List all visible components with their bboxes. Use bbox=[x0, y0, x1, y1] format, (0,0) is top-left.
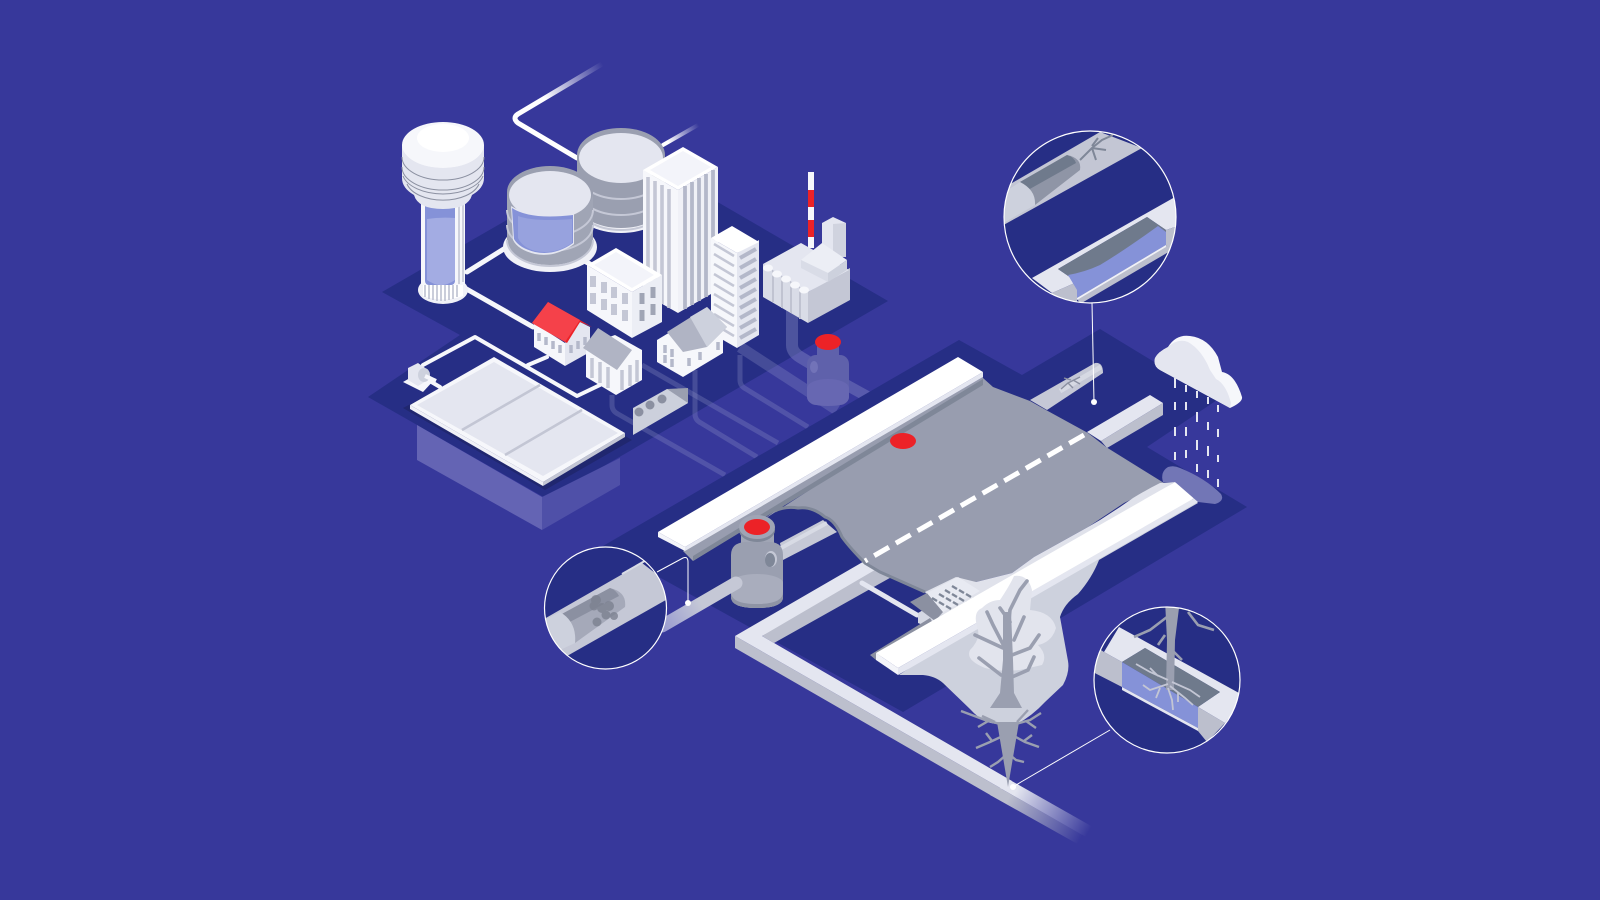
road bbox=[683, 377, 1175, 625]
roots bbox=[997, 722, 1019, 787]
callout: root intrusion bbox=[1093, 606, 1241, 754]
small branch pipe bbox=[862, 583, 917, 615]
upper kerb strip bbox=[683, 377, 983, 561]
platform: road ground bbox=[603, 329, 1247, 712]
chimney bbox=[808, 172, 814, 248]
road surface bbox=[760, 378, 1164, 592]
reservoir underground volume bbox=[417, 425, 620, 530]
storage tank: front, with water bbox=[503, 166, 597, 272]
channel section bbox=[1032, 198, 1176, 293]
upper white kerb bbox=[658, 357, 983, 551]
foliage bbox=[969, 576, 1056, 671]
crack bbox=[1080, 135, 1113, 160]
illustration: isometric water network bbox=[368, 64, 1246, 841]
building: factory bbox=[763, 172, 850, 323]
underground ghost pipes bbox=[612, 305, 872, 475]
house: cross-gabled bbox=[657, 307, 727, 377]
rain bbox=[1175, 378, 1218, 487]
callout leader: blockage bbox=[657, 558, 691, 606]
reservoir shadow bbox=[403, 360, 632, 490]
building: office block bbox=[587, 248, 662, 338]
red manhole bbox=[890, 433, 916, 449]
crack bbox=[1061, 377, 1080, 389]
valve chamber bottle bbox=[662, 515, 783, 626]
square channel frame bbox=[735, 552, 1107, 851]
trunk bbox=[990, 612, 1022, 708]
ghost valve chamber bbox=[807, 334, 849, 406]
inlet pipe bbox=[662, 583, 736, 626]
cracked pipe, upper right bbox=[1030, 363, 1103, 410]
building: slatted tower bbox=[711, 226, 759, 348]
concrete wall with holes bbox=[633, 388, 688, 435]
platform: city ground bbox=[368, 150, 888, 499]
water tower bbox=[402, 122, 484, 304]
ground blob under lower kerb bbox=[899, 490, 1198, 725]
red manhole bbox=[744, 519, 770, 535]
puddle bbox=[1162, 466, 1222, 504]
building: skyscraper bbox=[643, 147, 718, 313]
house: grey roof with columns bbox=[583, 328, 642, 395]
pipe behind bottle bbox=[780, 520, 837, 560]
callout: cracked pipe and leaking channel bbox=[1003, 130, 1177, 304]
pipe section bbox=[1000, 132, 1142, 227]
reservoir: settling tank bbox=[410, 357, 625, 486]
storm drain grate bbox=[910, 577, 980, 628]
icon: cloud bbox=[1155, 336, 1242, 408]
storage tank: rear bbox=[575, 128, 667, 233]
white distribution pipes bbox=[423, 64, 698, 396]
open channel, right bbox=[1087, 395, 1163, 448]
icon: pump bbox=[403, 363, 436, 392]
callout: blocked pipe bbox=[544, 546, 668, 670]
tree root bbox=[1165, 608, 1179, 690]
callout leader: crack bbox=[1091, 303, 1097, 405]
callout leader: roots bbox=[1010, 730, 1110, 790]
debris bbox=[590, 595, 618, 626]
tree bbox=[961, 576, 1056, 787]
red manhole bbox=[815, 334, 841, 350]
lower white kerb bbox=[870, 482, 1198, 675]
light shoulder bbox=[925, 482, 1175, 625]
centre dashes bbox=[865, 435, 1084, 561]
water window bbox=[511, 206, 574, 255]
house: red roof bbox=[532, 302, 592, 366]
